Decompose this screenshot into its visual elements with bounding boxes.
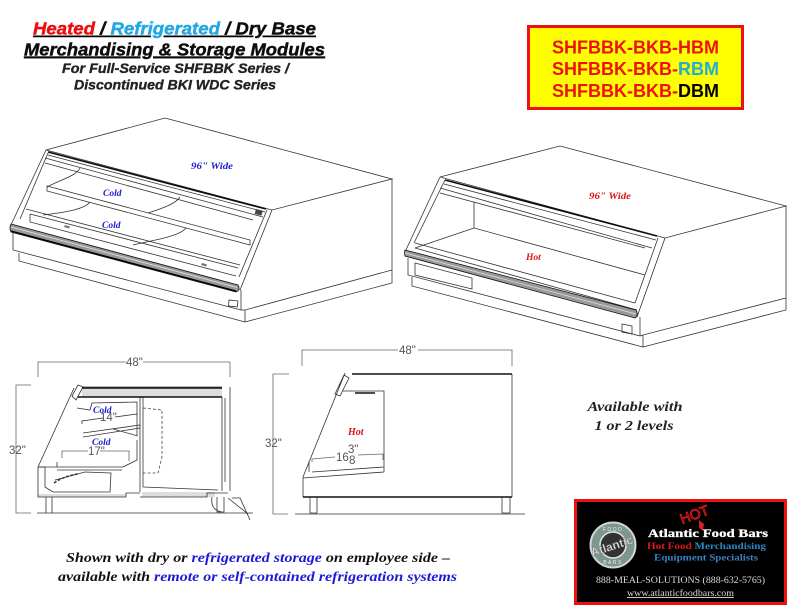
left module control panel — [255, 209, 263, 216]
left module light tabs — [64, 225, 207, 266]
right section hot label: Hot — [347, 427, 365, 438]
left section lower cold label: Cold — [92, 438, 111, 448]
title: For Full-Service SHFBBK Series / — [62, 61, 290, 76]
logo text: Equipment Specialists — [654, 554, 758, 564]
left section dimensions — [16, 362, 230, 513]
left section legs and floor — [37, 497, 253, 520]
right module width label: 96" Wide — [589, 191, 631, 201]
left side section drawing: 32" — [9, 445, 26, 457]
logo text: www.atlanticfoodbars.com — [627, 588, 734, 598]
logo text: Hot Food Merchandising — [647, 542, 766, 552]
title: Merchandising & Storage Modules — [24, 40, 325, 60]
model number box: SHFBBK-BKB-HBM — [552, 38, 719, 58]
right side section drawing: 3" — [348, 444, 358, 456]
left module front rail — [10, 224, 239, 292]
model number box: SHFBBK-BKB-RBM — [552, 59, 719, 79]
right module storage drawer — [415, 263, 472, 289]
logo text: Atlantic Food Bars — [648, 528, 769, 540]
availability note: 1 or 2 levels — [594, 418, 674, 433]
title: Heated / Refrigerated / Dry Base — [33, 18, 316, 38]
storage note — [58, 551, 458, 585]
storage note: available with remote or self-contained refrigeration systems — [58, 570, 458, 585]
icon: Atlantic logo badge — [589, 522, 636, 568]
storage note: Shown with dry or refrigerated storage on employee side – — [66, 551, 450, 566]
left side section drawing: 48" — [126, 357, 143, 369]
left section shelves — [38, 402, 140, 470]
left side section drawing — [9, 357, 253, 520]
icon: Atlantic logo badge: BARS — [603, 560, 623, 566]
right section legs and floor — [295, 497, 525, 514]
model number box — [528, 26, 742, 108]
right side section drawing — [265, 345, 525, 514]
left section dashed evaporator — [143, 408, 162, 473]
left section cabinet body — [82, 388, 222, 397]
left module outline — [10, 118, 392, 322]
availability note — [586, 399, 682, 433]
right side section drawing: 16 — [336, 452, 349, 464]
logo text — [596, 528, 769, 598]
left side section drawing: 14" — [100, 412, 117, 424]
right module interior — [414, 180, 658, 310]
right module front rail — [404, 250, 637, 318]
left module upper cold label: Cold — [103, 189, 122, 199]
right module hot label: Hot — [525, 253, 541, 263]
right module perspective drawing — [404, 146, 786, 347]
right side section drawing: 48" — [399, 345, 416, 357]
HOT badge: HOT — [678, 502, 711, 527]
left module frame and shelves — [20, 153, 267, 277]
right module outline — [405, 146, 786, 347]
right side section drawing: 8 — [349, 455, 355, 467]
logo text: 888-MEAL-SOLUTIONS (888-632-5765) — [596, 575, 765, 585]
left section upper cold label: Cold — [93, 406, 112, 416]
right section interior dimension — [312, 454, 383, 462]
left module width label: 96" Wide — [191, 161, 233, 171]
model number box: SHFBBK-BKB-DBM — [552, 81, 719, 101]
right module switch box — [622, 324, 632, 334]
logo panel: Atlantic Food Bars — [576, 500, 786, 604]
title: Discontinued BKI WDC Series — [74, 78, 277, 92]
icon: Atlantic logo badge: Atlantic — [589, 533, 635, 560]
icon: Atlantic logo badge: FOOD — [603, 527, 623, 533]
availability note: Available with — [586, 399, 682, 414]
left module lower cold label: Cold — [102, 221, 121, 231]
right section cabinet body — [303, 373, 512, 497]
left module perspective drawing — [10, 118, 392, 322]
right section dimensions — [273, 350, 512, 514]
left module switch box — [228, 300, 238, 307]
right side section drawing: 32" — [265, 438, 282, 450]
title — [24, 18, 325, 92]
left side section drawing: 17" — [88, 446, 105, 458]
